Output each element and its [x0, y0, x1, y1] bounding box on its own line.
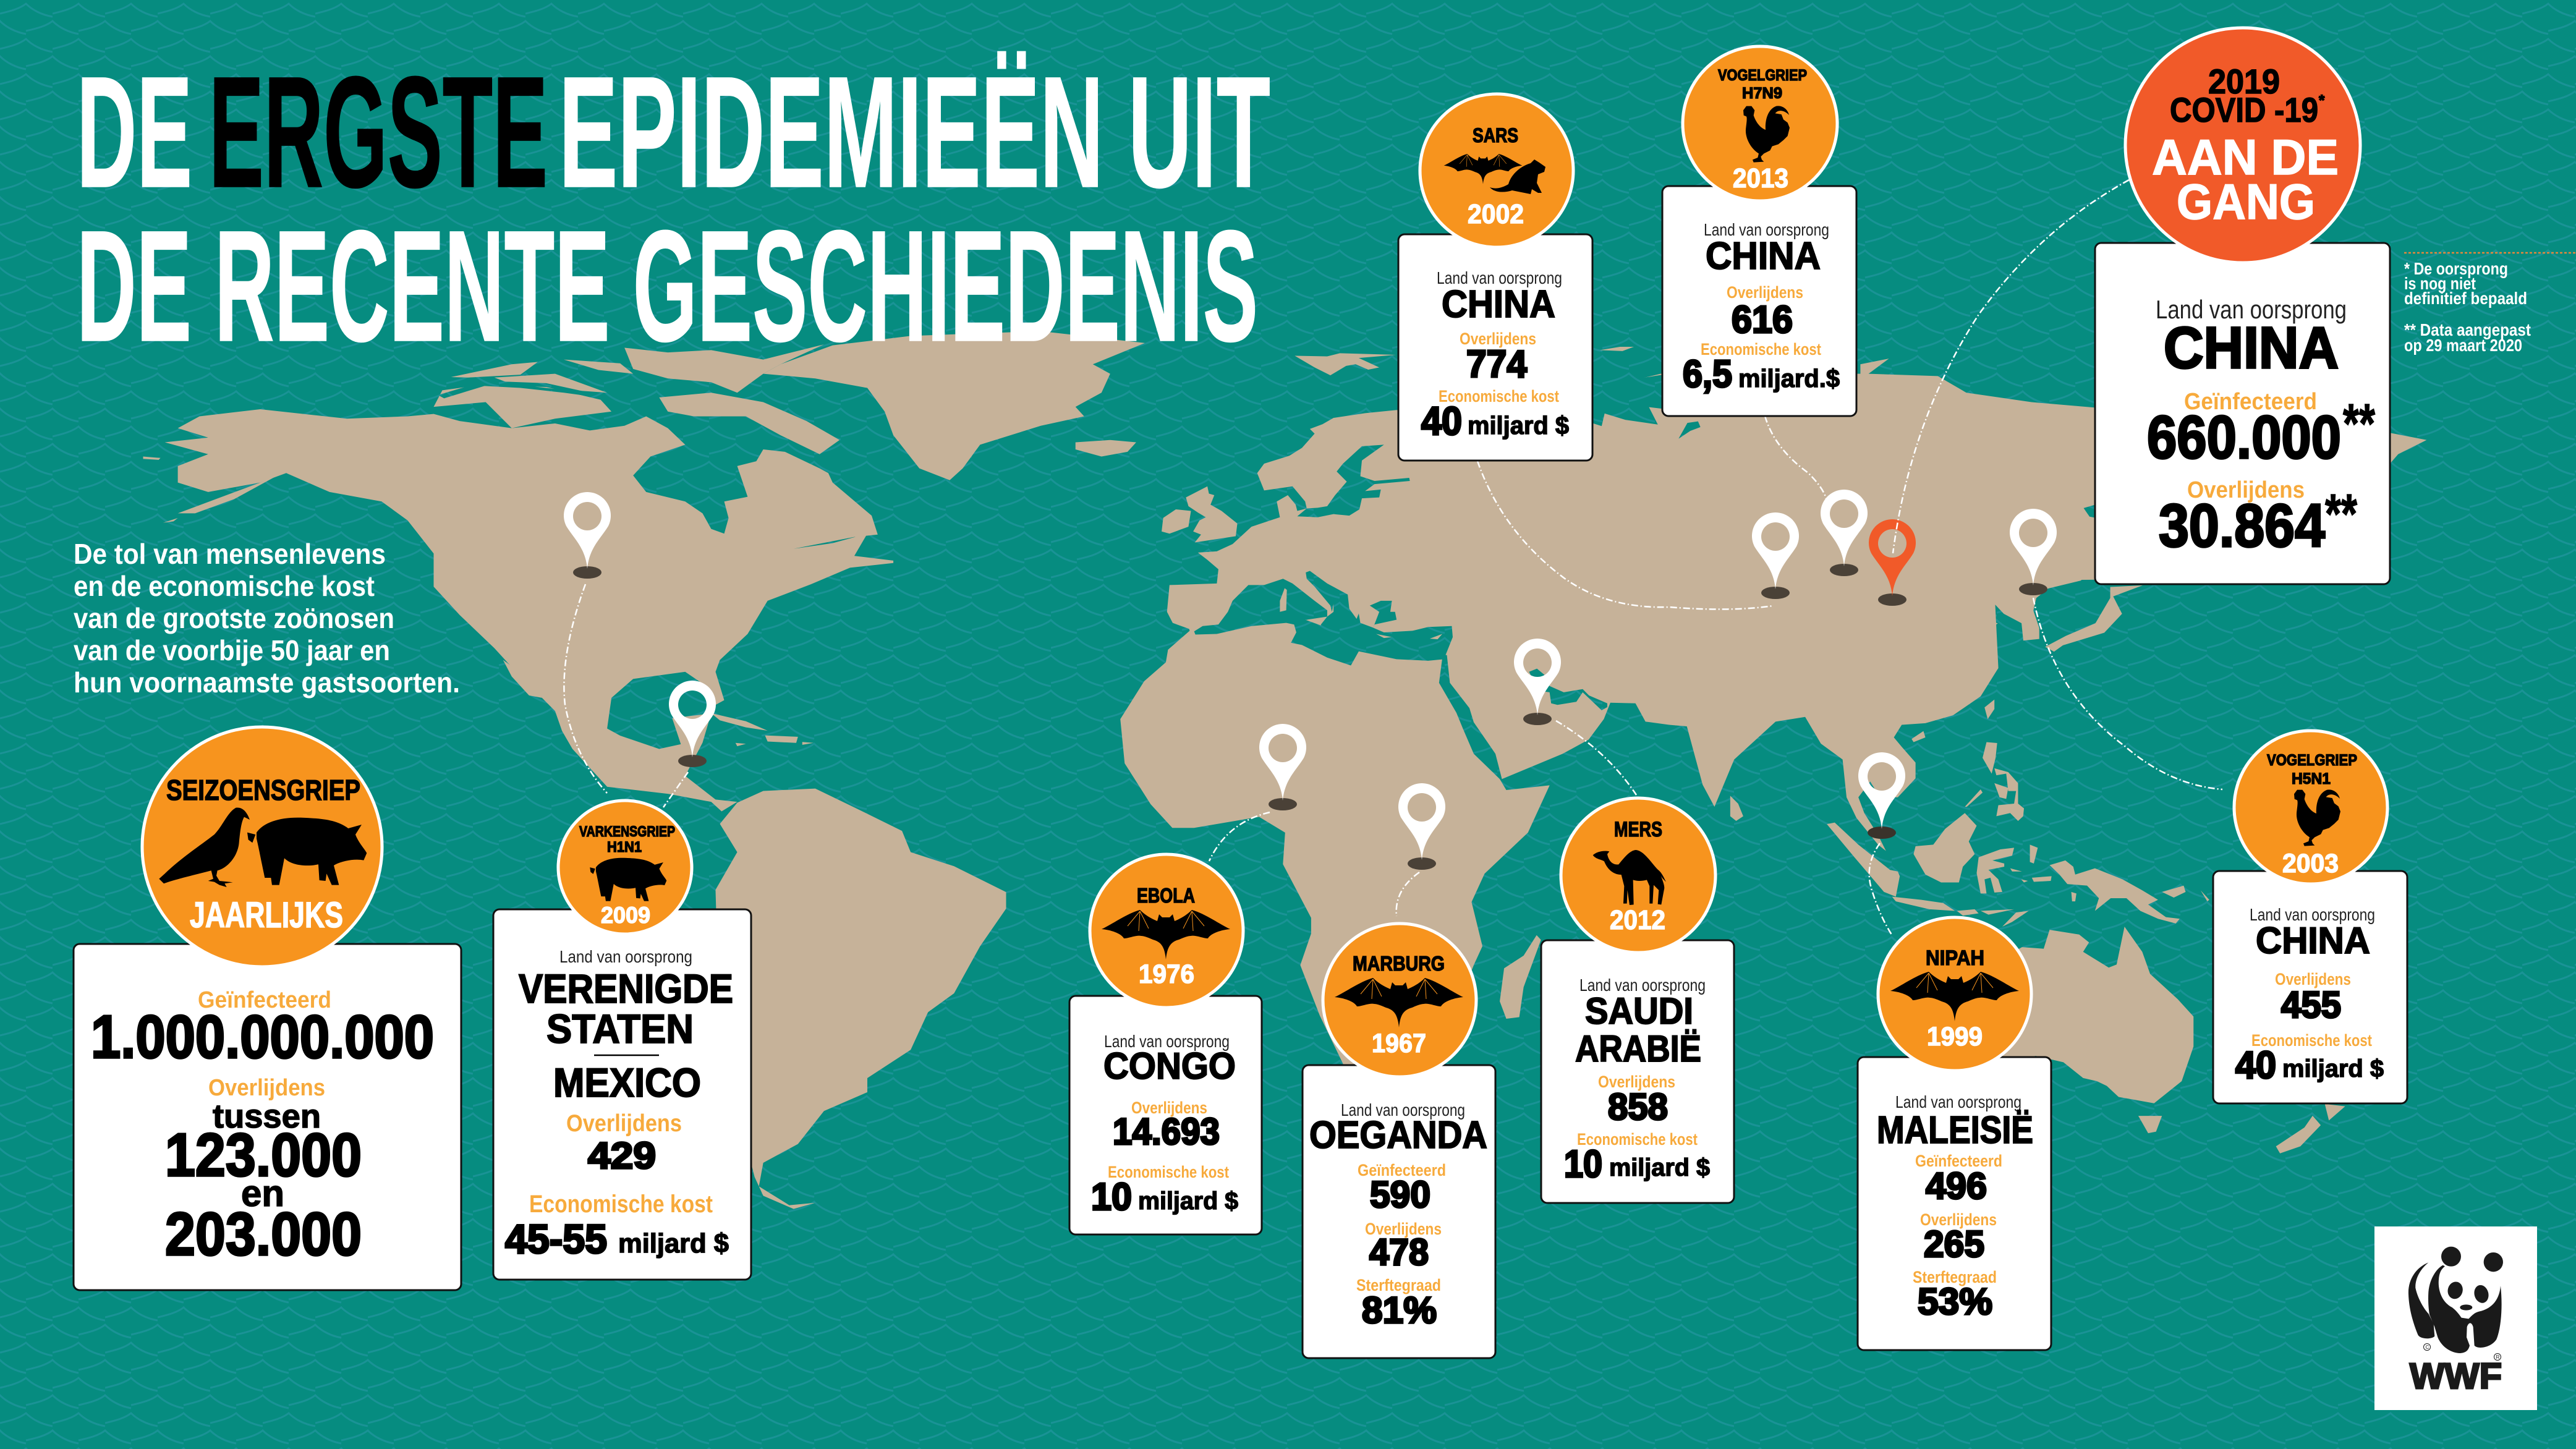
card: Marburg stats: OEGANDA: [1309, 1114, 1487, 1157]
card: Ebola stats: Land van oorsprong: [1104, 1032, 1230, 1051]
card: H7N9 stats: CHINA: [1706, 235, 1821, 278]
card: SARS stats: 40: [1421, 399, 1462, 443]
badge: seizoensgriep: [142, 727, 382, 967]
map pins: [564, 490, 2057, 870]
epidemic: seasonal flu: [74, 727, 461, 1290]
footnotes: op 29 maart 2020: [2404, 336, 2522, 355]
badge: Ebola: [1090, 854, 1243, 1008]
card: Ebola stats: Overlijdens: [1131, 1098, 1207, 1117]
badge: SARS: 2002: [1468, 199, 1524, 229]
badge: Ebola: EBOLA: [1137, 884, 1195, 907]
card: COVID-19 stats: Geïnfecteerd: [2184, 389, 2317, 415]
badge: Marburg: 1967: [1372, 1029, 1426, 1058]
card: seasonal flu stats: en: [241, 1173, 284, 1214]
badge: varkensgriep: [558, 801, 692, 934]
epidemic: SARS: [1398, 94, 1592, 461]
card: COVID-19 stats: 660.000: [2147, 403, 2341, 471]
badge: MERS: 2012: [1610, 905, 1665, 935]
card: Marburg stats: 81%: [1362, 1290, 1437, 1331]
card: H5N1 stats: CHINA: [2256, 920, 2370, 961]
card: MERS stats: [1541, 940, 1734, 1203]
icon: pigeon and pig: [159, 807, 367, 887]
card: H5N1 stats: [2213, 871, 2407, 1103]
badge: varkensgriep: 2009: [601, 903, 650, 928]
card: MERS stats: SAUDI: [1585, 990, 1693, 1032]
card: Marburg stats: 590: [1370, 1174, 1430, 1215]
badge: seizoensgriep: JAARLIJKS: [190, 895, 343, 935]
card: H7N9 stats: 616: [1732, 299, 1793, 341]
epidemic: Ebola: [1069, 854, 1262, 1234]
card: H7N9 stats: 6,5: [1683, 353, 1732, 396]
badge: Marburg: [1323, 924, 1476, 1077]
card: H7N9 stats: [1662, 186, 1856, 416]
card: Nipah stats: 496: [1926, 1165, 1987, 1207]
card: Marburg stats: Sterftegraad: [1356, 1276, 1441, 1294]
card: H1N1 stats: STATEN: [546, 1006, 694, 1052]
card: H1N1 stats: Land van oorsprong: [559, 947, 692, 966]
card: H1N1 stats: MEXICO: [553, 1060, 701, 1105]
badge: MERS: [1561, 798, 1715, 953]
badge: Ebola: 1976: [1139, 959, 1194, 989]
card: H1N1 stats: [493, 909, 751, 1280]
epidemic: H7N9 bird flu: [1662, 46, 1856, 416]
card: MERS stats: ARABIË: [1575, 1028, 1701, 1069]
card: MERS stats: Land van oorsprong: [1579, 975, 1706, 995]
card: Nipah stats: [1858, 1057, 2051, 1350]
badge: varkensgriep: H1N1: [607, 839, 642, 856]
card: Nipah stats: 265: [1924, 1223, 1984, 1265]
card: H7N9 stats: Economische kost: [1701, 340, 1821, 359]
card: seasonal flu stats: 1.000.000.000: [91, 1003, 434, 1071]
card: H5N1 stats: 40: [2235, 1044, 2276, 1087]
card: COVID-19 stats: **: [2343, 393, 2375, 455]
card: Ebola stats: miljard $: [1138, 1188, 1238, 1215]
card: Nipah stats: MALEISIË: [1877, 1109, 2033, 1152]
card: H1N1 stats: Overlijdens: [566, 1110, 682, 1137]
card: seasonal flu stats: Overlijdens: [208, 1075, 325, 1101]
card: Ebola stats: Economische kost: [1108, 1163, 1229, 1181]
card: Marburg stats: Overlijdens: [1365, 1220, 1442, 1238]
footnotes: [2404, 253, 2576, 355]
footnotes: is nog niet: [2404, 274, 2476, 293]
card: MERS stats: 10: [1564, 1143, 1602, 1186]
badge: Nipah: NIPAH: [1926, 946, 1984, 970]
card: Nipah stats: 53%: [1918, 1281, 1992, 1322]
intro text: De tol van mensenlevens: [74, 538, 386, 570]
epidemic: COVID-19: [2095, 28, 2390, 584]
card: MERS stats: Overlijdens: [1598, 1073, 1675, 1091]
card: COVID-19 stats: Overlijdens: [2187, 477, 2305, 503]
card: H1N1 stats: miljard $: [618, 1228, 729, 1259]
card: SARS stats: Economische kost: [1439, 387, 1559, 406]
badge: MERS: MERS: [1614, 818, 1662, 841]
card: seasonal flu stats: 203.000: [165, 1200, 362, 1268]
card: COVID-19 stats: CHINA: [2164, 315, 2339, 381]
card: H5N1 stats: Land van oorsprong: [2250, 905, 2375, 924]
footnotes: ** Data aangepast: [2404, 320, 2531, 339]
card: SARS stats: 774: [1466, 343, 1527, 386]
card: H5N1 stats: miljard $: [2282, 1055, 2384, 1082]
epidemic: H5N1 bird flu: [2213, 731, 2407, 1103]
card: COVID-19 stats: **: [2325, 483, 2357, 545]
card: COVID-19 stats: Land van oorsprong: [2156, 295, 2347, 324]
card: MERS stats: miljard $: [1609, 1154, 1710, 1181]
icon: camel: [1593, 850, 1666, 905]
icon: bat and rat: [1444, 154, 1545, 194]
footnotes: * De oorsprong: [2404, 259, 2508, 278]
card: Nipah stats: Overlijdens: [1920, 1210, 1997, 1229]
card: Ebola stats: 14.693: [1113, 1111, 1220, 1152]
badge: vogelgriep H7N9: H7N9: [1742, 85, 1782, 102]
intro text: van de voorbije 50 jaar en: [74, 634, 390, 666]
card: H7N9 stats: Overlijdens: [1727, 283, 1803, 302]
intro text: van de grootste zoönosen: [74, 602, 394, 634]
title: ERGSTE: [209, 44, 548, 221]
badge: vogelgriep H5N1: [2234, 731, 2387, 884]
card: Marburg stats: Land van oorsprong: [1341, 1100, 1465, 1120]
badge: varkensgriep: VARKENSGRIEP: [579, 823, 675, 840]
card: H5N1 stats: 455: [2281, 984, 2341, 1026]
epidemic: Marburg: [1303, 924, 1495, 1358]
intro text: hun voornaamste gastsoorten.: [74, 666, 460, 699]
title: DE: [77, 44, 192, 221]
badge: COVID-19: *: [2319, 92, 2325, 109]
icon: rooster: [2294, 789, 2340, 846]
badge: COVID-19: 2019: [2208, 62, 2280, 101]
card: seasonal flu stats: Geïnfecteerd: [198, 987, 331, 1013]
WWF logo: C: [2426, 1345, 2429, 1350]
card: Nipah stats: Geïnfecteerd: [1915, 1152, 2002, 1170]
badge: COVID-19: COVID -19: [2170, 90, 2318, 129]
footnotes: definitief bepaald: [2404, 289, 2527, 308]
badge: COVID-19: GANG: [2177, 174, 2315, 230]
card: MERS stats: Economische kost: [1577, 1130, 1698, 1149]
card: SARS stats: CHINA: [1442, 283, 1555, 326]
card: COVID-19 stats: 30.864: [2159, 491, 2325, 559]
card: Ebola stats: CONGO: [1103, 1045, 1236, 1087]
card: COVID-19 stats: [2095, 243, 2390, 584]
card: Marburg stats: 478: [1369, 1231, 1429, 1273]
card: H1N1 stats: 429: [588, 1135, 656, 1176]
WWF logo: R: [2496, 1354, 2500, 1360]
card: H7N9 stats: miljard.$: [1738, 364, 1840, 393]
badge: seizoensgriep: SEIZOENSGRIEP: [166, 774, 360, 806]
card: H5N1 stats: Overlijdens: [2275, 970, 2351, 988]
card: H1N1 stats: Economische kost: [529, 1191, 713, 1218]
world map: [143, 333, 2427, 1209]
icon: rooster: [1743, 106, 1790, 163]
intro text: en de economische kost: [74, 570, 375, 602]
icon: bat: [1335, 978, 1463, 1027]
badge: Nipah: [1878, 917, 2031, 1071]
title: [77, 44, 1270, 375]
WWF logo: [2374, 1226, 2537, 1410]
card: H1N1 stats: VERENIGDE: [519, 966, 733, 1011]
title: EPIDEMIEËN UIT: [559, 44, 1270, 221]
card: SARS stats: miljard $: [1468, 411, 1569, 440]
WWF logo: WWF: [2410, 1356, 2502, 1396]
card: SARS stats: Land van oorsprong: [1437, 268, 1562, 287]
badge: Nipah: 1999: [1927, 1022, 1983, 1052]
dashed connector lines: [564, 180, 2222, 935]
card: seasonal flu stats: tussen: [213, 1098, 321, 1135]
icon: bat: [1102, 910, 1230, 959]
icon: bat: [1890, 972, 2019, 1021]
card: Nipah stats: Sterftegraad: [1913, 1268, 1997, 1286]
badge: Marburg: MARBURG: [1353, 952, 1445, 975]
badge: vogelgriep H7N9: VOGELGRIEP: [1718, 67, 1807, 84]
card: H1N1 stats: 45-55: [505, 1216, 607, 1262]
card: Ebola stats: 10: [1091, 1176, 1132, 1218]
intro text: [74, 538, 460, 699]
badge: vogelgriep H5N1: VOGELGRIEP: [2267, 752, 2357, 769]
badge: COVID-19: AAN DE: [2152, 130, 2339, 185]
card: SARS stats: [1398, 234, 1592, 461]
badge: SARS: SARS: [1473, 124, 1518, 147]
card: SARS stats: Overlijdens: [1460, 329, 1536, 348]
epidemic: MERS: [1541, 798, 1734, 1203]
card: Ebola stats: [1069, 996, 1262, 1234]
card: Marburg stats: [1303, 1065, 1495, 1358]
card: H7N9 stats: Land van oorsprong: [1704, 220, 1829, 239]
badge: COVID-19: [2125, 28, 2360, 263]
card: MERS stats: 858: [1608, 1086, 1668, 1128]
card: Marburg stats: Geïnfecteerd: [1358, 1161, 1446, 1179]
epidemic: H1N1 swine flu: [493, 801, 751, 1280]
card: seasonal flu stats: [74, 944, 461, 1290]
badge: vogelgriep H5N1: H5N1: [2292, 770, 2331, 788]
badge: vogelgriep H7N9: [1683, 46, 1837, 201]
icon: pig: [590, 858, 666, 901]
epidemic: Nipah: [1858, 917, 2051, 1350]
card: H5N1 stats: Economische kost: [2251, 1031, 2372, 1050]
badge: vogelgriep H7N9: 2013: [1733, 163, 1788, 193]
badge: SARS: [1420, 94, 1573, 247]
badge: vogelgriep H5N1: 2003: [2282, 849, 2339, 878]
title: DE RECENTE GESCHIEDENIS: [77, 198, 1258, 375]
card: Nipah stats: Land van oorsprong: [1895, 1092, 2021, 1111]
card: seasonal flu stats: 123.000: [165, 1121, 362, 1189]
